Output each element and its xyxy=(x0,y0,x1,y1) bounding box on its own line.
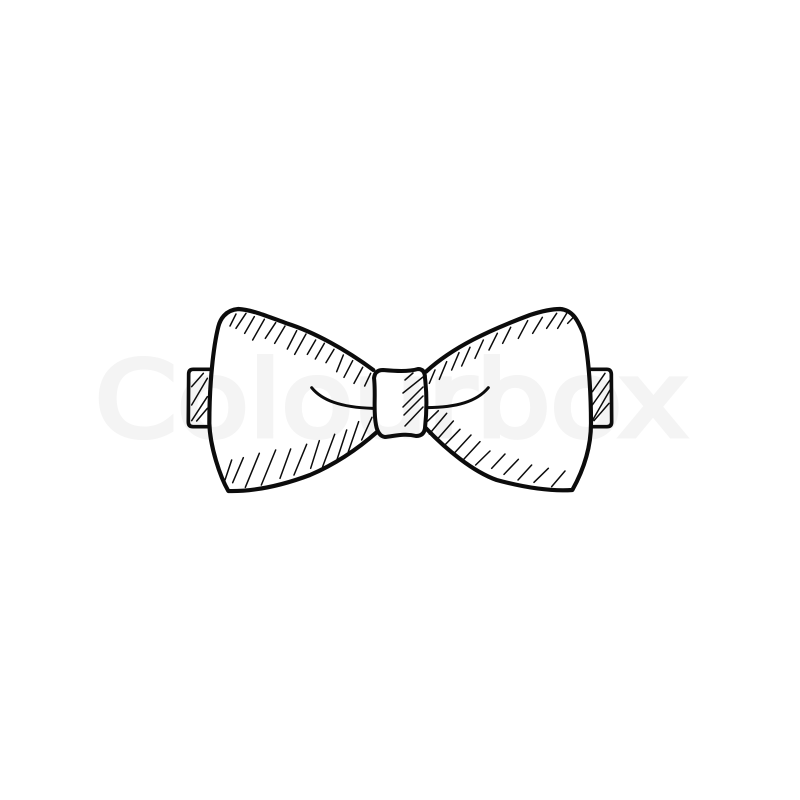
right wing xyxy=(426,309,591,490)
watermark text: Colourbox xyxy=(95,339,688,461)
left tab outline xyxy=(188,369,209,427)
knot hatching xyxy=(403,373,423,426)
right strap tab xyxy=(591,369,612,427)
left wing xyxy=(209,309,377,491)
left inner crease xyxy=(312,388,373,408)
right wing outline xyxy=(426,309,591,490)
left tab hatching xyxy=(192,373,207,421)
left strap tab xyxy=(188,369,209,427)
left wing upper fold hatching xyxy=(230,313,371,386)
left wing outline xyxy=(209,309,377,491)
icon: bow tie xyxy=(188,309,612,491)
center knot xyxy=(374,369,426,437)
right tab outline xyxy=(591,369,612,427)
left wing lower fold hatching xyxy=(225,417,372,487)
right wing upper fold hatching xyxy=(429,313,573,383)
right tab hatching xyxy=(592,373,610,421)
right inner crease xyxy=(427,388,488,408)
knot outline xyxy=(374,369,426,437)
right wing lower fold hatching xyxy=(426,411,565,487)
